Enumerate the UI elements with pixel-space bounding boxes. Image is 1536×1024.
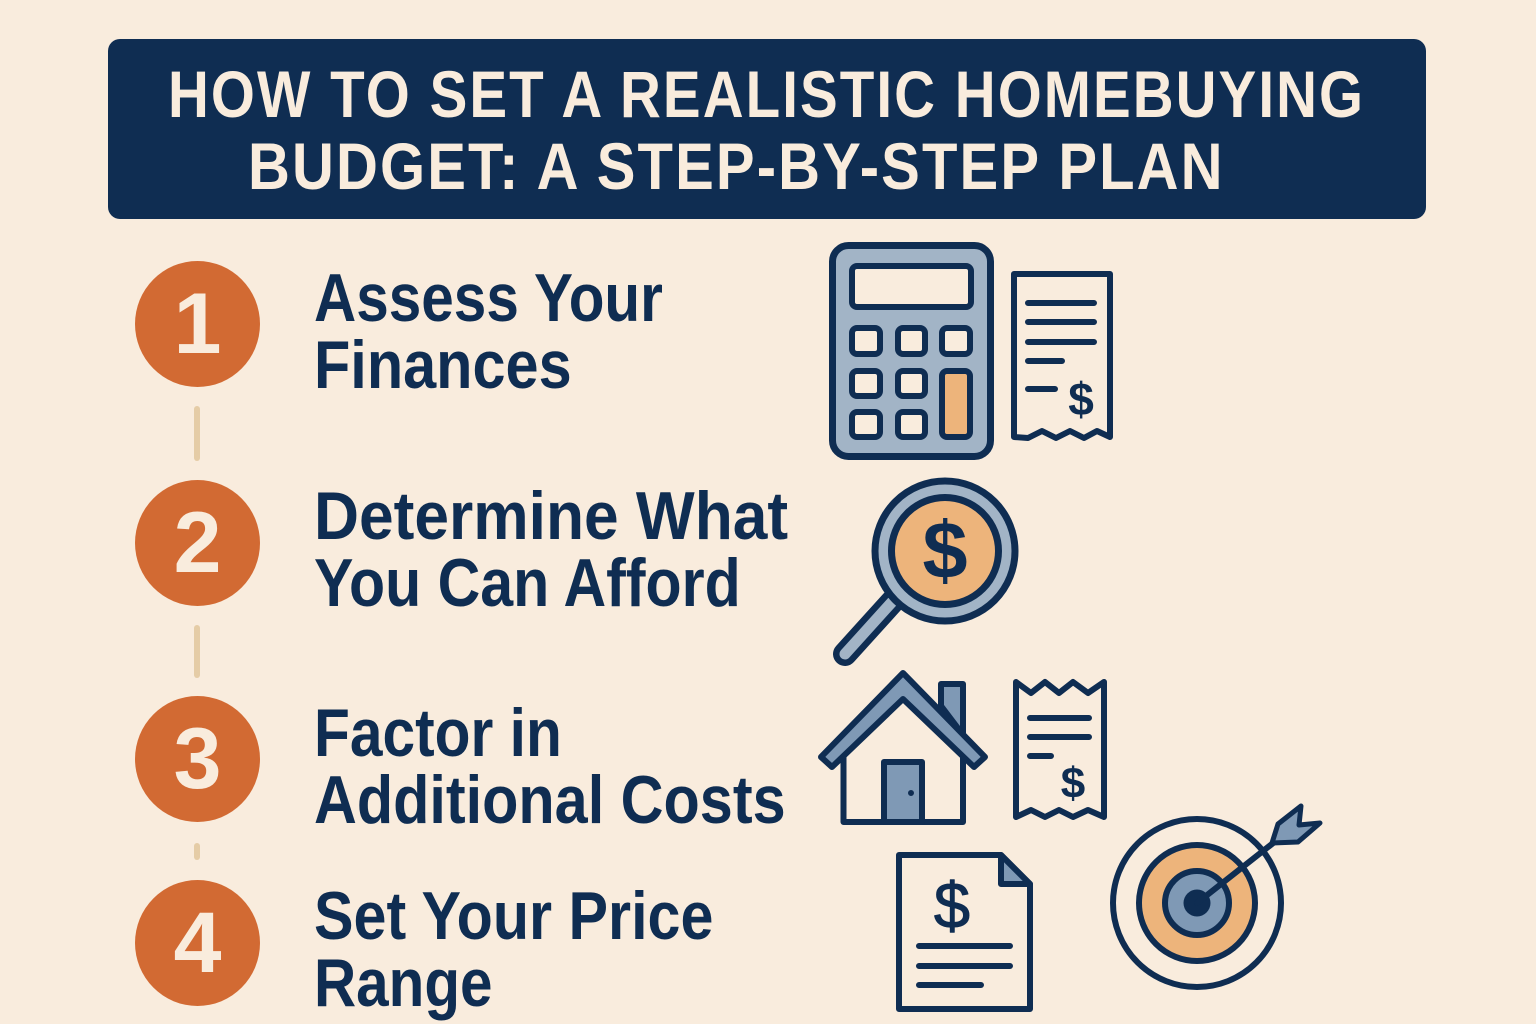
connector: step 2 to 3: [194, 625, 200, 678]
step 4 text: Set Your Price: [314, 878, 713, 954]
icon: house: [821, 673, 985, 822]
title banner: BUDGET: A STEP-BY-STEP PLAN: [248, 129, 1225, 203]
step 3 text: Additional Costs: [314, 762, 786, 838]
step 4 text: [314, 878, 713, 1021]
step 1 text: [314, 260, 663, 403]
title banner: [108, 39, 1426, 219]
step 3 number: 3: [174, 711, 221, 807]
step 4 number: [135, 880, 260, 1006]
step 1 text: Finances: [314, 327, 572, 403]
icon: document: $: [934, 869, 970, 942]
icon: receipt: [1014, 274, 1110, 438]
icon: magnifying glass: $: [922, 506, 968, 596]
step 2 number: [135, 480, 260, 606]
icon: magnifying glass: [845, 481, 1015, 654]
title banner: HOW TO SET A REALISTIC HOMEBUYING: [168, 57, 1365, 131]
step 4 text: Range: [314, 945, 493, 1021]
step 1 number: [135, 261, 260, 387]
icon: target with arrow: [1113, 806, 1320, 987]
step 2 text: Determine What: [314, 478, 788, 554]
step 3 number: [135, 696, 260, 822]
icon: bill: [1016, 682, 1104, 817]
step 4 number: 4: [174, 895, 221, 991]
step 2 text: [314, 478, 788, 621]
icon: document: [899, 855, 1030, 1009]
step 2 number: 2: [174, 495, 221, 591]
icon: calculator: [832, 246, 990, 456]
step 1 number: 1: [174, 276, 221, 372]
step 1 text: Assess Your: [314, 260, 663, 336]
icon: bill: $: [1061, 759, 1085, 808]
icon: receipt: $: [1068, 373, 1094, 425]
connector: step 3 to 4: [194, 843, 200, 860]
step 3 text: [314, 695, 786, 838]
step 3 text: Factor in: [314, 695, 562, 771]
connector: step 1 to 2: [194, 406, 200, 461]
step 2 text: You Can Afford: [314, 545, 741, 621]
